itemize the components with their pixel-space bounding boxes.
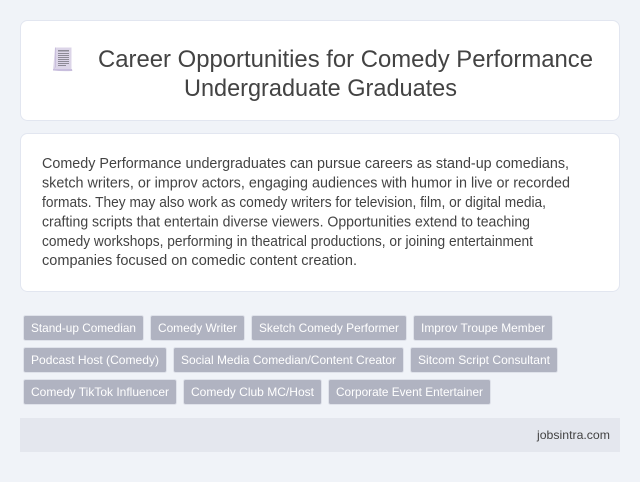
footer bar	[20, 418, 620, 452]
tag: Comedy TikTok Influencer: Comedy TikTok Influencer	[31, 385, 169, 399]
text block: description: crafting scripts that entertain diverse viewers. Opportunities extend to teaching	[42, 214, 530, 230]
tag: Comedy Club MC/Host: Comedy Club MC/Host	[191, 385, 315, 399]
text block: description: comedy workshops, performing in theatrical productions, or joining entertainment	[42, 234, 533, 250]
panel: description	[20, 134, 620, 292]
tag list	[24, 316, 558, 404]
tag: Improv Troupe Member: Improv Troupe Member	[421, 321, 545, 335]
tag: Corporate Event Entertainer	[328, 380, 490, 404]
tag: Improv Troupe Member	[414, 316, 552, 340]
text block: description	[42, 156, 570, 269]
tag: Podcast Host (Comedy): Podcast Host (Comedy)	[31, 353, 159, 367]
tag: Social Media Comedian/Content Creator: Social Media Comedian/Content Creator	[181, 353, 396, 367]
tag: Sitcom Script Consultant: Sitcom Script Consultant	[418, 353, 551, 367]
panel: title card	[20, 20, 620, 120]
tag: Comedy TikTok Influencer	[24, 380, 176, 404]
text block: description: companies focused on comedic content creation.	[42, 253, 357, 269]
tag: Stand-up Comedian	[24, 316, 144, 340]
tag: Podcast Host (Comedy)	[24, 348, 166, 372]
tag: Sitcom Script Consultant	[410, 348, 558, 372]
tag: Comedy Writer	[150, 316, 244, 340]
heading: title: Undergraduate Graduates	[184, 75, 457, 102]
heading: title	[98, 46, 593, 102]
heading: title: Career Opportunities for Comedy Performance	[98, 46, 593, 73]
tag: Corporate Event Entertainer: Corporate Event Entertainer	[336, 385, 483, 399]
tag: Comedy Writer: Comedy Writer	[158, 321, 237, 335]
tag: Comedy Club MC/Host	[184, 380, 322, 404]
tag: Sketch Comedy Performer: Sketch Comedy Performer	[259, 321, 399, 335]
text block: description: Comedy Performance undergraduates can pursue careers as stand-up comedians,	[42, 156, 569, 172]
icon: document scroll	[53, 48, 73, 71]
text block: description: sketch writers, or improv actors, engaging audiences with humor in live or recorded	[42, 176, 570, 192]
footer text: source: jobsintra.com	[536, 428, 610, 442]
text block: description: formats. They may also work as comedy writers for television, film, or digital media,	[42, 195, 546, 211]
tag: Stand-up Comedian: Stand-up Comedian	[31, 321, 136, 335]
tag: Sketch Comedy Performer	[252, 316, 406, 340]
tag: Social Media Comedian/Content Creator	[174, 348, 404, 372]
